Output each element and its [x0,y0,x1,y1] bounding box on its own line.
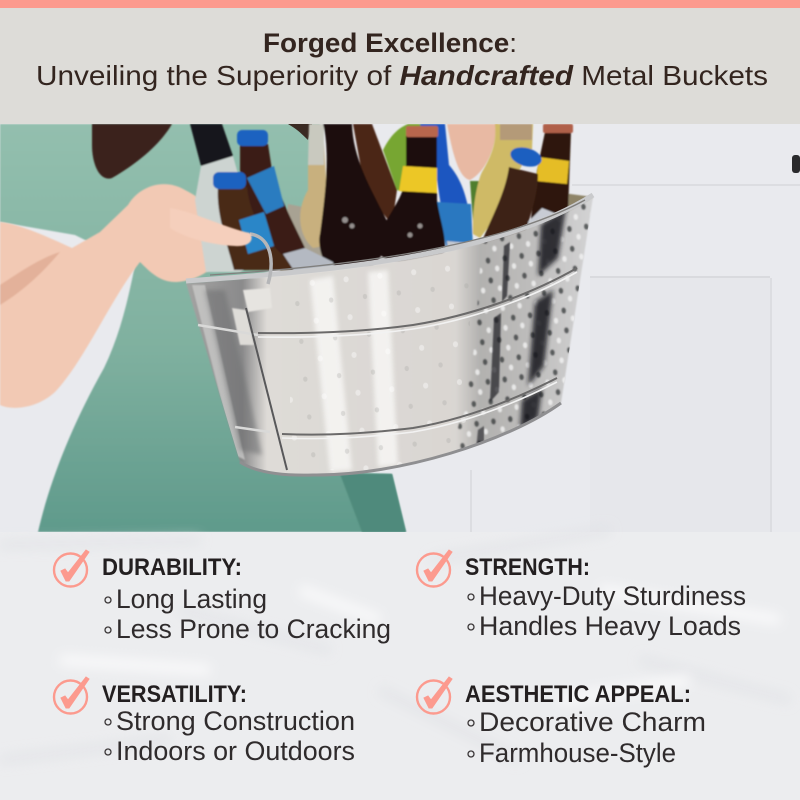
bullet list: Strong Construction [116,706,355,736]
bottom rim [240,403,561,475]
dark bottle tall [319,124,388,266]
dark reflections [538,208,566,276]
feature: strength [417,550,746,641]
pale bottle right [473,124,533,238]
header band [0,8,800,124]
brown bottle behind [353,124,397,225]
heading: AESTHETIC APPEAL: [465,681,691,708]
blue bottle [419,124,468,205]
dress fold [340,474,406,532]
bucket body [186,197,593,475]
bucket inner back wall [280,204,323,271]
dark bottle with black cap [194,155,244,273]
bucket bands [258,268,577,333]
green bottle [382,124,422,193]
icon: check circle [417,677,452,714]
heading: VERSATILITY: [102,681,247,708]
blue-cap bottle back [240,144,309,270]
arm and hand [0,183,208,408]
green dress [0,124,406,532]
Brecker bock bottle [377,135,445,262]
left side panel reflections [192,285,245,460]
top rim [186,195,593,281]
feature: versatility [54,677,355,766]
handle ring [250,234,271,284]
metal bucket [186,190,595,475]
bullet list: Long Lasting [116,584,267,614]
hair [92,124,172,179]
green small bottle [469,180,480,220]
bullet list [468,581,746,641]
hammered dimples [192,190,595,472]
blue-cap bottle front [218,187,295,270]
bullet list: Decorative Charm [479,707,706,737]
back hand [447,124,498,180]
subtitle: Unveiling the Superiority of Handcrafted Metal Buckets [36,60,768,91]
bullet list [105,584,391,644]
mirror highlights [310,276,352,472]
clear bottle back left [300,145,328,248]
fingers over rim [196,216,253,248]
brown bottle with blue cap right [481,167,538,244]
bullet list: Farmhouse-Style [479,738,676,768]
icon: check circle [417,550,452,586]
title: Forged Excellence : [263,28,517,58]
icon: check circle [54,677,89,714]
photo: woman carrying hammered metal bucket of bottles [0,124,800,532]
icon: check circle [54,550,89,586]
bottles [190,124,593,272]
heading: DURABILITY: [102,554,242,581]
heading: STRENGTH: [465,554,590,581]
bullet list [105,706,355,766]
feature: durability [54,550,391,644]
ice [283,248,335,272]
kitchen cabinet background [0,124,800,532]
bullet list [468,707,706,768]
feature: aesthetic appeal [417,677,706,768]
bullet list: Indoors or Outdoors [116,736,355,766]
bullet list: Less Prone to Cracking [116,614,391,644]
bock bottle right [530,132,571,226]
marble panel [0,530,800,800]
seam [246,308,287,470]
top accent stripe [0,0,800,8]
bullet list: Handles Heavy Loads [479,611,741,641]
bullet list: Heavy-Duty Sturdiness [479,581,746,611]
